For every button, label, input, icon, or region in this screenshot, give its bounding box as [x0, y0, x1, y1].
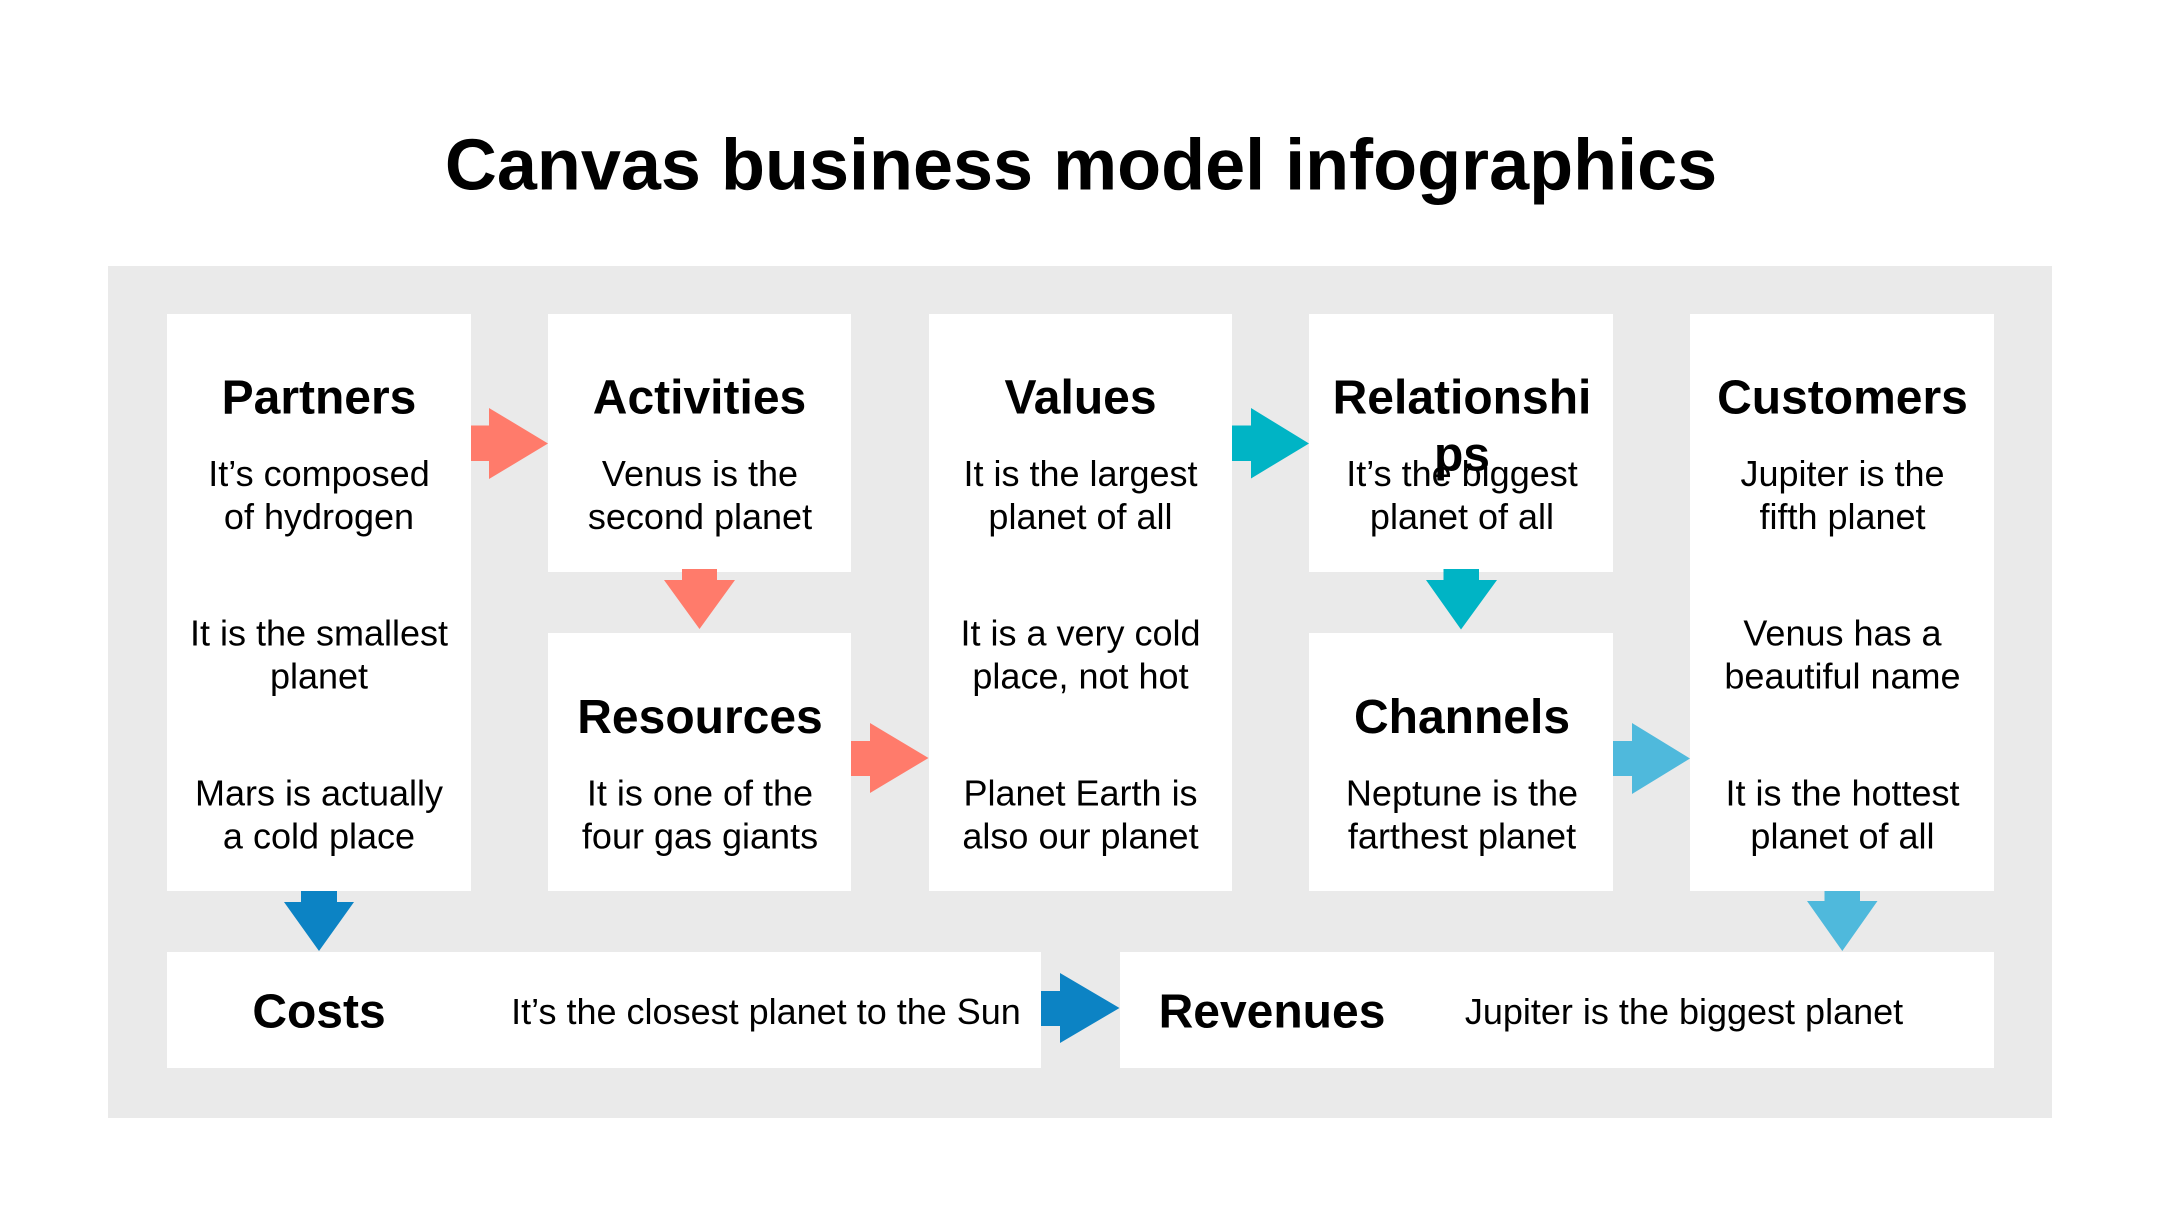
text: resources: It is one of the: [587, 772, 813, 814]
arrow: partners to costs: [284, 891, 354, 951]
text: relationships: planet of all: [1370, 496, 1554, 537]
text: customers 1: fifth planet: [1759, 496, 1926, 537]
text: partners 1: of hydrogen: [224, 496, 414, 537]
text: values 2: It is a very cold: [960, 612, 1201, 654]
arrow: costs to revenues: [1041, 973, 1120, 1043]
text: resources: four gas giants: [582, 816, 818, 856]
text: customers 1: Jupiter is the: [1740, 453, 1945, 494]
arrow: partners to activities: [471, 408, 548, 479]
text: values 3: Planet Earth is: [963, 772, 1198, 814]
arrow: relationships to channels: [1426, 569, 1497, 630]
arrow: values to relationships: [1232, 408, 1309, 478]
text: customers 2: Venus has a: [1743, 612, 1943, 654]
heading: relationships: Relationshi: [1333, 372, 1591, 424]
panel: activities: [548, 314, 851, 572]
text: activities: second planet: [588, 496, 812, 537]
heading: values: Values: [1004, 372, 1157, 424]
text: values 2: place, not hot: [972, 656, 1189, 696]
arrow: channels to customers: [1613, 723, 1690, 794]
heading: partners: Partners: [222, 372, 416, 424]
text: partners 3: a cold place: [223, 816, 415, 856]
text: customers 3: It is the hottest: [1725, 772, 1960, 814]
panel: partners: [167, 314, 471, 891]
panel: values: [929, 314, 1232, 891]
panel: revenues: [1120, 952, 1994, 1068]
heading: channels: Channels: [1354, 691, 1570, 744]
text: values 3: also our planet: [962, 816, 1199, 856]
text: relationships: It’s the biggest: [1346, 453, 1578, 494]
text: activities: Venus is the: [602, 453, 798, 494]
panel: costs: [167, 952, 1041, 1068]
arrow: customers to revenues: [1807, 891, 1878, 951]
text: customers 2: beautiful name: [1724, 656, 1961, 696]
panel: customers: [1690, 314, 1994, 891]
text: values 1: It is the largest: [963, 453, 1198, 494]
heading: revenues: Revenues: [1159, 986, 1385, 1038]
text: channels: farthest planet: [1348, 816, 1576, 856]
title: Canvas business model infographics: [445, 126, 1717, 206]
text: revenues: Jupiter is the biggest planet: [1465, 991, 1903, 1032]
panel: canvas background: [108, 266, 2052, 1118]
text: channels: Neptune is the: [1346, 772, 1578, 814]
heading: activities: Activities: [593, 372, 806, 424]
arrow: activities to resources: [664, 569, 735, 629]
heading: relationships: ps: [1434, 428, 1490, 482]
heading: customers: Customers: [1717, 372, 1968, 424]
heading: resources: Resources: [577, 691, 823, 744]
panel: resources: [548, 633, 851, 891]
panel: channels: [1309, 633, 1613, 891]
text: customers 3: planet of all: [1750, 816, 1935, 856]
arrow: resources to values: [851, 723, 928, 793]
heading: costs: Costs: [252, 986, 386, 1038]
text: partners 1: It’s composed: [208, 453, 430, 494]
text: values 1: planet of all: [988, 496, 1173, 537]
text: partners 2: It is the smallest: [190, 612, 448, 654]
panel: relationships: [1309, 314, 1613, 572]
text: partners 3: Mars is actually: [195, 772, 443, 814]
text: partners 2: planet: [270, 656, 368, 696]
text: costs: It’s the closest planet to the Sun: [511, 991, 1021, 1032]
